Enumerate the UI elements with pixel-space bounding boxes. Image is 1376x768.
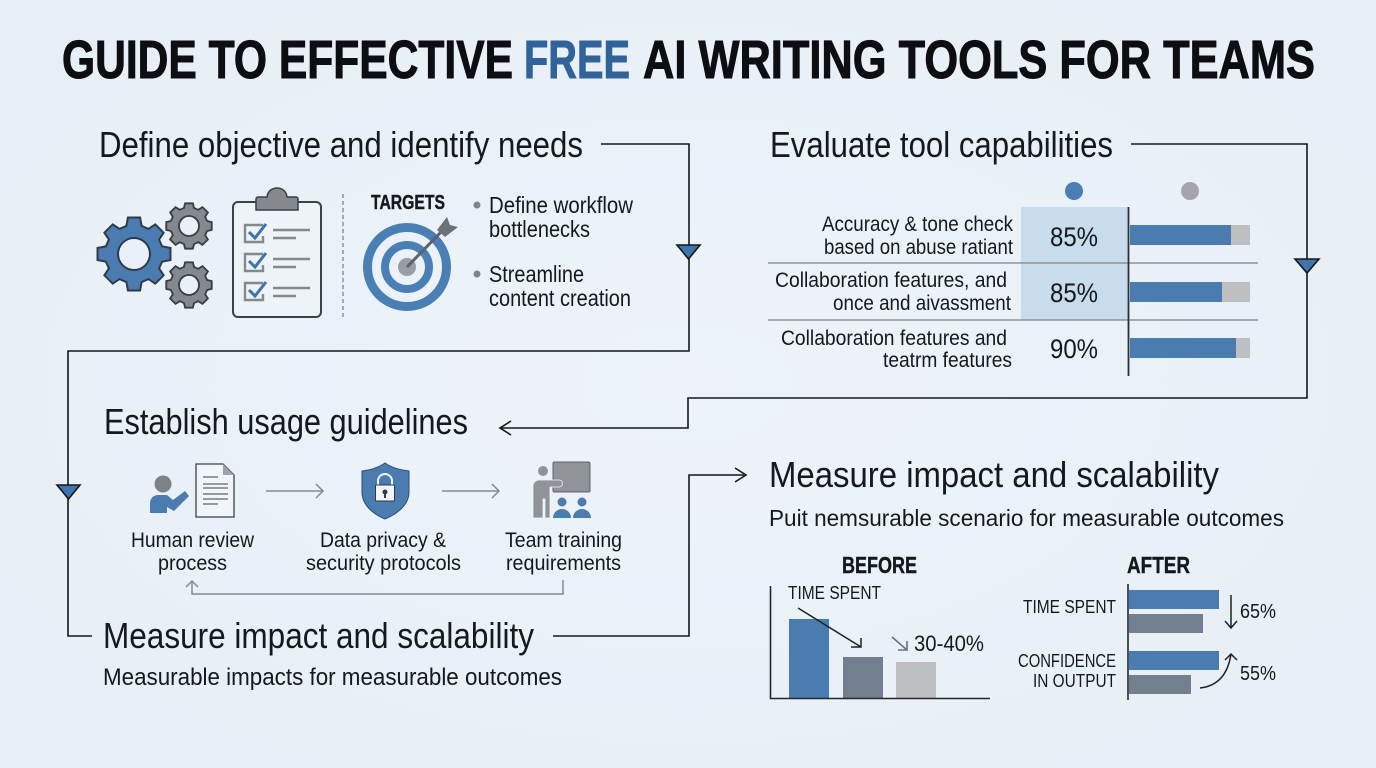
connector: evaluate to guidelines section — [500, 144, 1319, 435]
title: FREE — [524, 30, 630, 90]
title — [62, 30, 1315, 90]
row 3 — [781, 327, 1250, 372]
table highlight column — [1021, 207, 1128, 320]
panel: define objective — [98, 124, 633, 317]
chart: before — [770, 552, 990, 698]
label: data privacy — [306, 529, 461, 575]
row 3: 90% — [1050, 334, 1098, 364]
chart: after: IN OUTPUT — [1033, 671, 1116, 691]
icon: clipboard checklist — [233, 188, 321, 317]
bullet list — [474, 192, 633, 311]
bullet list: content creation — [489, 285, 631, 311]
label: human review process: process — [158, 552, 227, 575]
arrow — [442, 484, 499, 498]
row 2: Collaboration features, and — [775, 269, 1007, 292]
heading: measure impact: Measure impact and scalability — [769, 454, 1219, 495]
chart: before: 30-40% — [914, 631, 984, 656]
legend dots — [1065, 182, 1199, 200]
panel: measure impact left — [103, 615, 562, 691]
icon: security shield — [362, 463, 409, 519]
row 2: 85% — [1050, 278, 1098, 308]
arrow — [266, 484, 323, 498]
row 3: teatrm features — [883, 349, 1012, 372]
heading: define objective: Define objective and identify needs — [99, 124, 583, 165]
panel: establish usage guidelines — [104, 401, 622, 594]
chart: before: TIME SPENT — [788, 583, 881, 603]
subheading: Puit nemsurable scenario for measurable outcomes — [769, 505, 1284, 531]
panel: evaluate tool capabilities — [768, 124, 1258, 376]
label: team training: requirements — [506, 552, 621, 575]
subheading: Measurable impacts for measurable outcomes — [103, 664, 562, 691]
chart: after: 55% — [1240, 663, 1276, 685]
label: data privacy: Data privacy & — [320, 529, 446, 552]
icon: gears — [98, 203, 212, 308]
row 1: based on abuse ratiant — [824, 236, 1013, 259]
chart: after: AFTER — [1127, 552, 1190, 578]
bullet list: bottlenecks — [489, 216, 590, 242]
label: human review process — [131, 529, 255, 575]
label: team training: Team training — [505, 529, 622, 552]
row 2: once and aivassment — [833, 292, 1011, 315]
label: team training — [505, 529, 622, 575]
heading: establish: Establish usage guidelines — [104, 401, 468, 442]
row 2 — [775, 269, 1250, 315]
icon: team training — [533, 462, 591, 518]
row 1: 85% — [1050, 222, 1098, 252]
icon: human review — [150, 464, 234, 517]
bullet list: Define workflow — [489, 192, 633, 218]
panel: measure impact right — [769, 454, 1284, 700]
label: targets: TARGETS — [371, 192, 445, 214]
title: GUIDE TO EFFECTIVE — [62, 30, 513, 90]
chart: after — [1018, 552, 1276, 700]
heading: evaluate: Evaluate tool capabilities — [770, 124, 1113, 165]
label: data privacy: security protocols — [306, 552, 461, 575]
feedback arrow — [186, 580, 563, 594]
chart: after: TIME SPENT — [1023, 597, 1116, 617]
icon: target with arrow — [368, 217, 458, 306]
label: human review process: Human review — [131, 529, 255, 552]
bullet list: Streamline — [489, 261, 584, 287]
chart: after: CONFIDENCE — [1018, 651, 1116, 671]
heading: measure impact: Measure impact and scalability — [103, 615, 534, 656]
connector: define to guidelines section — [57, 144, 700, 636]
row 3: Collaboration features and — [781, 327, 1007, 350]
connector: measure left to measure right — [553, 468, 746, 636]
chart: before: BEFORE — [842, 552, 917, 578]
row 1: Accuracy & tone check — [822, 213, 1013, 236]
chart: after: 65% — [1240, 601, 1276, 623]
row 1 — [822, 213, 1250, 259]
